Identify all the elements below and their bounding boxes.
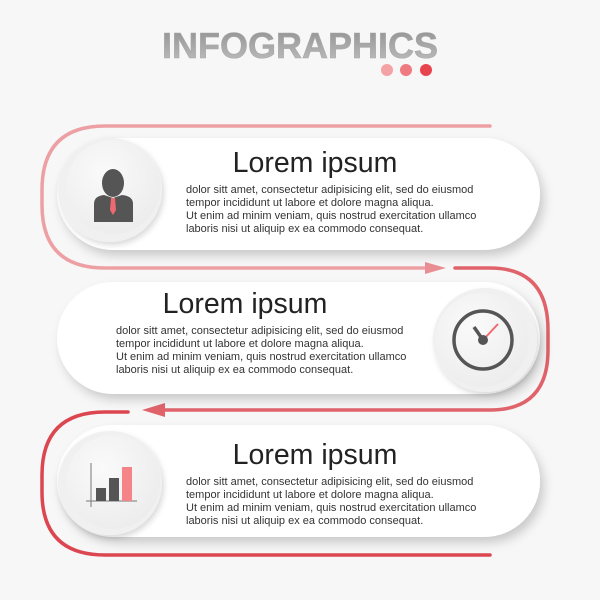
body 1: dolor sitt amet, consectetur adipisicing elit, sed do eiusmod [186, 184, 473, 196]
icon: person [58, 138, 162, 242]
icon: bar chart [58, 431, 162, 535]
body 2: dolor sitt amet, consectetur adipisicing elit, sed do eiusmod [116, 325, 403, 337]
body 3: tempor incididunt ut labore et dolore magna aliqua. [186, 489, 434, 501]
body 1: tempor incididunt ut labore et dolore magna aliqua. [186, 197, 434, 209]
heading 3: Lorem ipsum [233, 439, 397, 471]
arrow path bottom [42, 412, 490, 555]
body 3: laboris nisi ut aliquip ex ea commodo consequat. [186, 515, 423, 527]
body 2: tempor incididunt ut labore et dolore magna aliqua. [116, 338, 364, 350]
panel 3 [57, 425, 540, 537]
title: INFOGRAPHICS [162, 25, 438, 66]
body 1: laboris nisi ut aliquip ex ea commodo consequat. [186, 223, 423, 235]
panel 1 [57, 138, 540, 250]
panel 2 [57, 282, 540, 394]
arrow path middle [142, 268, 548, 417]
body 1: Ut enim ad minim veniam, quis nostrud exercitation ullamco [186, 210, 476, 222]
icon: clock [433, 288, 537, 392]
body 2: Ut enim ad minim veniam, quis nostrud exercitation ullamco [116, 351, 406, 363]
title dots [381, 64, 432, 76]
heading 1: Lorem ipsum [233, 147, 397, 179]
body 3: Ut enim ad minim veniam, quis nostrud exercitation ullamco [186, 502, 476, 514]
heading 2: Lorem ipsum [163, 288, 327, 320]
arrow path top [42, 126, 490, 274]
body 3: dolor sitt amet, consectetur adipisicing elit, sed do eiusmod [186, 476, 473, 488]
body 2: laboris nisi ut aliquip ex ea commodo consequat. [116, 364, 353, 376]
